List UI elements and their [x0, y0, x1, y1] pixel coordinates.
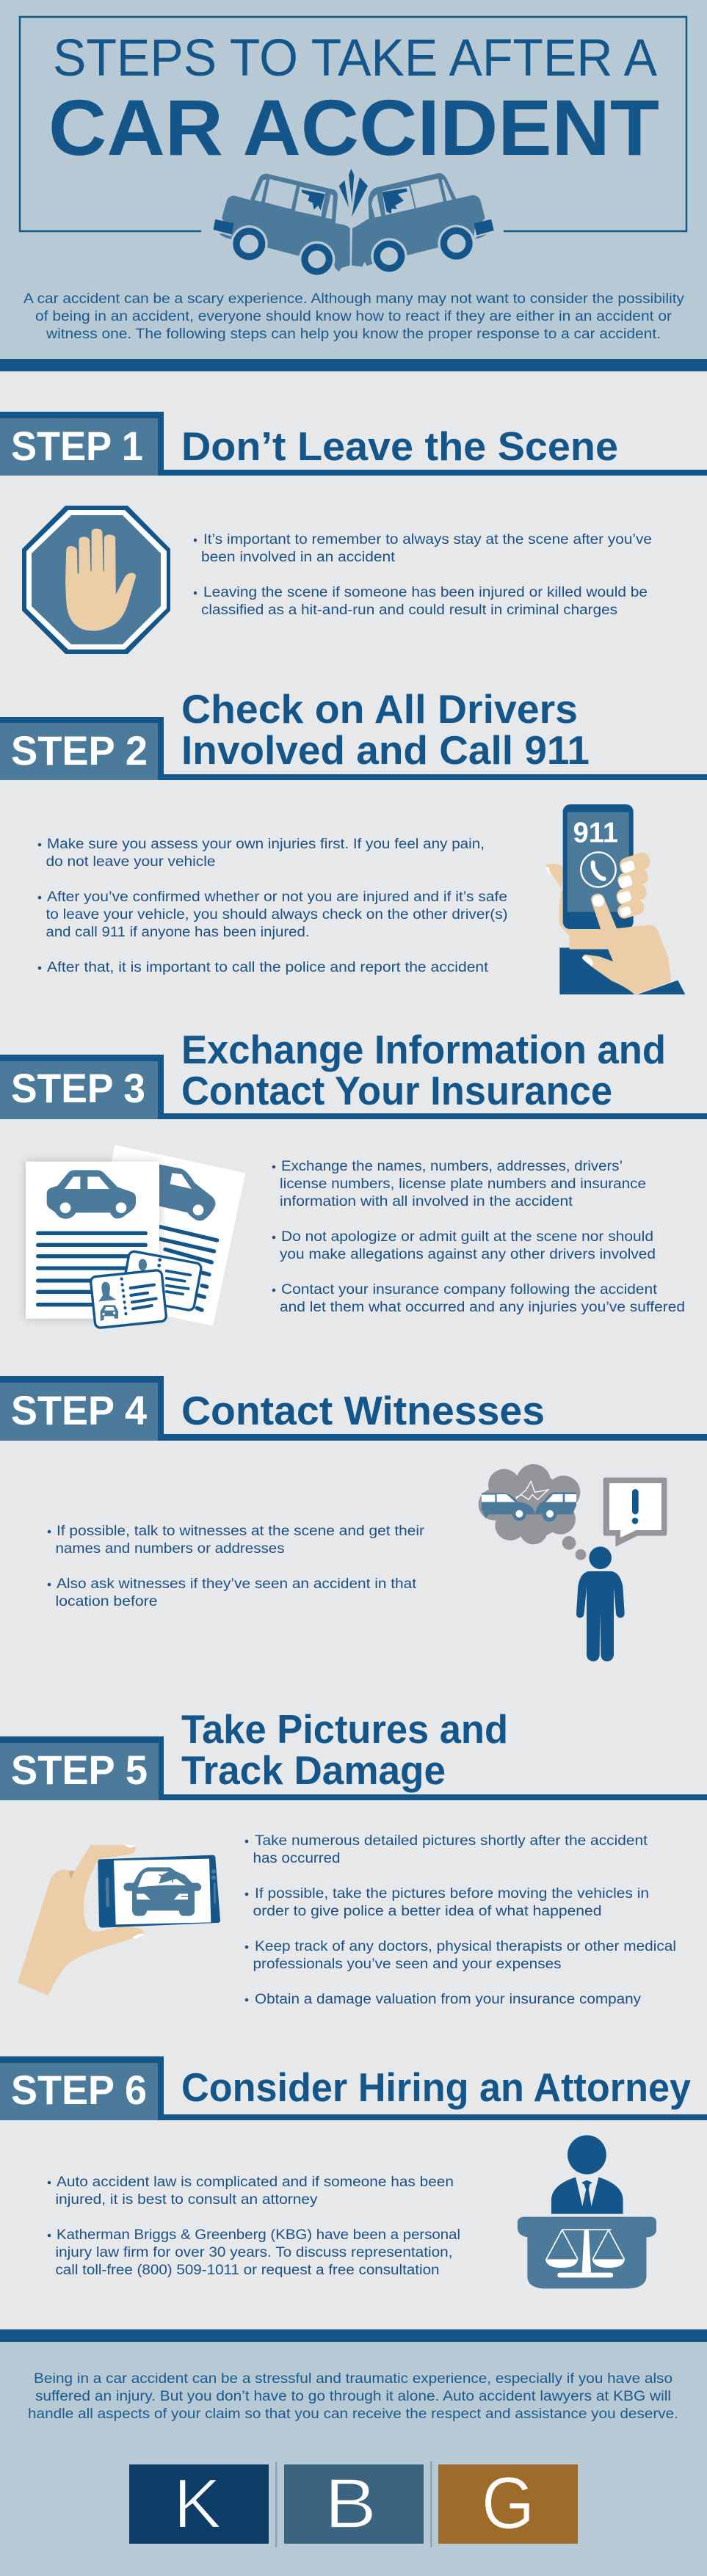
- title frame: [20, 17, 686, 231]
- icon: attorney at podium with scales: [518, 2135, 656, 2288]
- step 1 banner: STEP 1: [11, 423, 143, 469]
- panel: step 1: [0, 412, 707, 654]
- step 5 text: If possible, take the pictures before moving the vehicles in: [255, 1886, 649, 1902]
- intro paragraph: witness one. The following steps can help you know the proper response to a car accident.: [46, 327, 661, 342]
- step 4 heading: Contact Witnesses: [181, 1388, 545, 1433]
- step 1 heading: Don’t Leave the Scene: [181, 423, 618, 469]
- step 3 heading: Exchange Information and: [181, 1027, 666, 1072]
- podium: [518, 2217, 656, 2288]
- step 2 banner: STEP 2: [11, 727, 148, 774]
- panel: step 5: [0, 1706, 707, 2007]
- step 6 banner: STEP 6: [11, 2067, 147, 2113]
- icon: two cars crashing: [214, 169, 493, 277]
- icon: witness recalling accident: [479, 1464, 667, 1662]
- step 3 text: license numbers, license plate numbers and insurance: [280, 1176, 646, 1192]
- title: car accident: CAR ACCIDENT: [48, 83, 659, 172]
- closing paragraph: handle all aspects of your claim so that you can receive the respect and assistance you deserve.: [28, 2406, 678, 2422]
- step 1 text: classified as a hit-and-run and could result in criminal charges: [201, 603, 617, 618]
- step 5 text: Take numerous detailed pictures shortly after the accident: [255, 1833, 648, 1849]
- step 2 text: and call 911 if anyone has been injured.: [46, 925, 310, 940]
- person figure: [576, 1546, 625, 1662]
- step 2 text: do not leave your vehicle: [46, 854, 216, 870]
- panel: step 3: [0, 1027, 707, 1328]
- panel: step 4: [0, 1376, 707, 1662]
- step 6 heading: Consider Hiring an Attorney: [181, 2064, 691, 2110]
- step 3 text: and let them what occurred and any injuries you’ve suffered: [280, 1300, 685, 1315]
- step 2 banner: [0, 717, 707, 780]
- step 2 text: [38, 837, 507, 975]
- step 6 text: injured, it is best to consult an attorney: [56, 2192, 318, 2208]
- step 5 heading: [181, 1706, 508, 1793]
- thought cloud with crash: [479, 1464, 586, 1560]
- icon: hand photographing damage with phone: [18, 1845, 218, 1995]
- closing paragraph: [28, 2371, 678, 2422]
- step 5 text: professionals you’ve seen and your expenses: [253, 1957, 561, 1972]
- attorney figure: [551, 2135, 623, 2214]
- intro paragraph: [23, 291, 685, 342]
- step 5 text: Keep track of any doctors, physical therapists or other medical: [255, 1939, 676, 1954]
- step 6 banner: [0, 2056, 707, 2120]
- step 6 text: injury law firm for over 30 years. To discuss representation,: [56, 2245, 452, 2260]
- step 4 text: location before: [56, 1594, 157, 1609]
- step 5 heading: Take Pictures and: [181, 1706, 508, 1752]
- step 2 text: to leave your vehicle, you should always check on the other driver(s): [46, 907, 508, 923]
- step 3 text: information with all involved in the accident: [280, 1194, 573, 1209]
- step 2 heading: [181, 686, 590, 773]
- step 4 banner: STEP 4: [11, 1387, 147, 1433]
- step 5 text: [245, 1833, 676, 2007]
- closing paragraph: suffered an injury. But you don’t have to go through it alone. Auto accident lawyers at KBG will: [35, 2389, 671, 2404]
- step 3 text: Do not apologize or admit guilt at the scene nor should: [281, 1229, 653, 1245]
- step 3 heading: Contact Your Insurance: [181, 1068, 612, 1113]
- panel: footer: [0, 2329, 707, 2576]
- KBG logo: B: [325, 2464, 377, 2543]
- step 3 text: [272, 1159, 685, 1315]
- step 5 heading: Track Damage: [181, 1747, 446, 1793]
- icon: stop sign with hand: [22, 506, 170, 654]
- title: steps to take after a: STEPS TO TAKE AFTER A: [53, 29, 658, 87]
- step 4 text: [48, 1524, 425, 1609]
- KBG logo: [129, 2462, 578, 2547]
- closing paragraph: Being in a car accident can be a stressful and traumatic experience, especially if you have also: [34, 2371, 672, 2387]
- step 2 text: Make sure you assess your own injuries first. If you feel any pain,: [47, 837, 485, 852]
- step 3 text: you make allegations against any other drivers involved: [280, 1247, 656, 1262]
- step 6 text: [48, 2175, 460, 2278]
- icon: hand dialing 911 on phone: [545, 804, 685, 995]
- step 6 text: Katherman Briggs & Greenberg (KBG) have been a personal: [57, 2227, 460, 2243]
- scales of justice: [545, 2229, 625, 2277]
- step 2 text: After you’ve confirmed whether or not you are injured and if it’s safe: [47, 889, 507, 905]
- header divider bar: [0, 359, 707, 371]
- step 2 heading: Check on All Drivers: [181, 686, 578, 732]
- step 4 banner: [0, 1376, 707, 1441]
- step 3 heading: [181, 1027, 666, 1113]
- step 1 text: It’s important to remember to always stay at the scene after you’ve: [203, 532, 652, 547]
- intro paragraph: of being in an accident, everyone should know how to react if they are either in an accident or: [35, 309, 672, 324]
- step 6 text: Auto accident law is complicated and if someone has been: [57, 2175, 454, 2190]
- step 4 text: If possible, talk to witnesses at the scene and get their: [57, 1524, 425, 1539]
- step 3 text: Exchange the names, numbers, addresses, drivers’: [281, 1159, 623, 1174]
- step 1 banner: [0, 412, 707, 476]
- step 4 text: Also ask witnesses if they’ve seen an accident in that: [57, 1576, 417, 1592]
- step 5 text: Obtain a damage valuation from your insurance company: [255, 1992, 642, 2007]
- step 1 text: Leaving the scene if someone has been injured or killed would be: [203, 585, 648, 600]
- footer divider bar: [0, 2329, 707, 2342]
- step 2 heading: Involved and Call 911: [181, 727, 590, 773]
- step 1 text: been involved in an accident: [201, 550, 396, 565]
- step 3 banner: [0, 1055, 707, 1119]
- step 3 text: Contact your insurance company following the accident: [281, 1282, 658, 1298]
- panel: header: [0, 0, 707, 371]
- icon: documents and license cards: [26, 1145, 245, 1328]
- step 6 text: call toll-free (800) 509-1011 or request a free consultation: [56, 2263, 439, 2278]
- icon: hand dialing 911 on phone: 911: [573, 816, 618, 848]
- KBG logo: G: [482, 2462, 534, 2544]
- panel: step 6: [0, 2056, 707, 2288]
- step 5 banner: [0, 1736, 707, 1800]
- step 5 text: has occurred: [253, 1851, 341, 1866]
- speech bubble with exclamation: [603, 1477, 667, 1547]
- step 3 banner: STEP 3: [11, 1065, 145, 1111]
- intro paragraph: A car accident can be a scary experience. Although many may not want to consider the possibility: [23, 291, 685, 307]
- step 5 banner: STEP 5: [11, 1747, 148, 1793]
- panel: step 2: [0, 686, 707, 995]
- step 4 text: names and numbers or addresses: [56, 1541, 285, 1557]
- step 1 text: [194, 532, 652, 618]
- KBG logo: K: [173, 2464, 222, 2543]
- step 5 text: order to give police a better idea of what happened: [253, 1904, 602, 1919]
- step 2 text: After that, it is important to call the police and report the accident: [47, 960, 489, 975]
